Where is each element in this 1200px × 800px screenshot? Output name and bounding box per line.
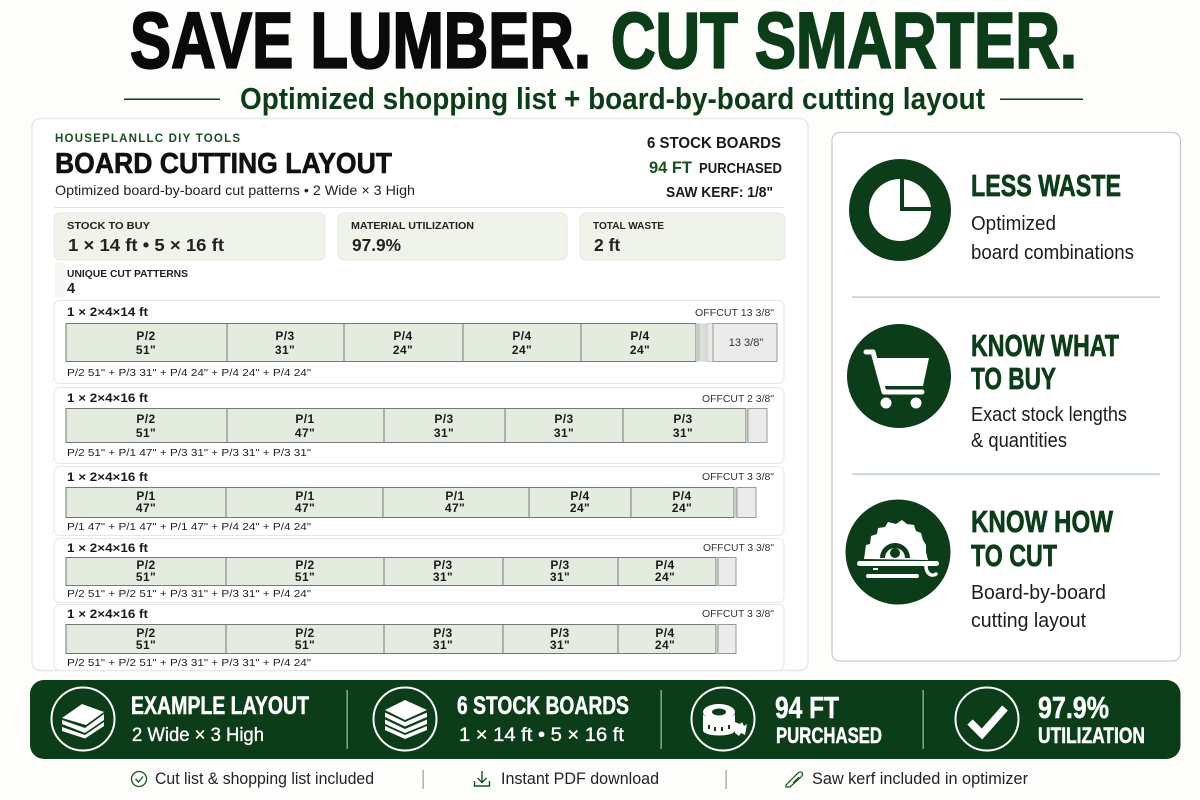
board row 3: 16 ft: 1 × 2×4×16 ft [67,472,148,484]
icon: tape measure [692,688,754,750]
benefit: less waste: LESS WASTE [971,168,1121,203]
stat: example layout [131,692,309,746]
board row 1: 14 ft: P/4 [393,329,413,343]
header summary: 6 STOCK BOARDS [647,135,781,152]
panel header [55,133,415,198]
stat: 6 stock boards: 6 STOCK BOARDS [457,692,629,720]
board row 5: 16 ft: 51" [295,638,315,652]
board row 4: 16 ft: P/2 [136,558,156,572]
benefit: know how to cut [971,504,1114,632]
board row 4: 16 ft: 1 × 2×4×16 ft [67,543,148,555]
benefit: less waste: board combinations [971,241,1134,264]
benefit: know how to cut: Board-by-board [971,581,1106,604]
board row 1: 14 ft: 13 3/8" [729,337,763,349]
header summary: 94 FT [649,159,692,177]
board row 1: 14 ft: P/4 [512,329,532,343]
stat: total waste: TOTAL WASTE [593,220,664,232]
benefit: less waste: Optimized [971,212,1056,235]
stat: material utilization: MATERIAL UTILIZATION [351,220,474,232]
board row 1: 14 ft: 31" [275,343,295,357]
benefit: less waste [971,168,1134,264]
stat: unique cut patterns: UNIQUE CUT PATTERNS [67,268,188,280]
board row 5: 16 ft: 51" [136,638,156,652]
board row 4: 16 ft: P/3 [550,558,570,572]
stat: 6 stock boards: 1 × 14 ft • 5 × 16 ft [459,725,625,746]
board row 1: 14 ft: OFFCUT 13 3/8" [695,307,774,319]
panel header: BOARD CUTTING LAYOUT [55,148,392,180]
footer note: cut list: Cut list & shopping list included [155,769,374,788]
board row 3: 16 ft: P/4 [570,489,590,503]
stat: material utilization [338,213,567,260]
board row 1: 14 ft: 51" [136,343,156,357]
icon: circular saw [846,500,950,604]
icon: board pile [374,688,436,750]
board row 3: 16 ft: P/1 [445,489,465,503]
board row 5: 16 ft: OFFCUT 3 3/8" [702,608,774,620]
board row 3: 16 ft: P/4 [672,489,692,503]
benefit: know what to buy: KNOW WHAT [971,328,1119,363]
stat: example layout: 2 Wide × 3 High [132,725,264,746]
header summary: PURCHASED [699,161,782,177]
board row 2: 16 ft: P/2 [136,412,156,426]
footer note: pdf download: Instant PDF download [501,769,659,788]
board row 1: 14 ft: P/4 [630,329,650,343]
stat: total waste [580,213,785,260]
stat: total waste: 2 ft [594,235,620,255]
panel: board cutting layout [32,118,808,670]
stat: 94 ft purchased [775,690,882,748]
board row 2: 16 ft: P/1 [295,412,315,426]
panel header: HOUSEPLANLLC DIY TOOLS [55,133,240,145]
panel header: Optimized board-by-board cut patterns • 2 Wide × 3 High [55,182,415,198]
board row 4: 16 ft: 24" [655,570,675,584]
board row 4: 16 ft: P/2 51" + P/2 51" + P/3 31" + P/3 31" + P/4 24" [67,588,311,600]
board row 5: 16 ft: 31" [433,638,453,652]
benefit: know what to buy [971,328,1127,452]
board row 3: 16 ft: 24" [672,501,692,515]
board row 1: 14 ft [54,300,784,384]
board row 4: 16 ft: 31" [433,570,453,584]
board row 1: 14 ft: 1 × 2×4×14 ft [67,307,148,319]
board row 2: 16 ft: P/3 [673,412,693,426]
benefit: know what to buy: TO BUY [971,361,1056,396]
subtitle with rules: Optimized shopping list + board-by-board cutting layout [240,81,985,116]
board row 5: 16 ft: P/3 [433,626,453,640]
board row 2: 16 ft: 1 × 2×4×16 ft [67,393,148,405]
benefit: know how to cut: cutting layout [971,609,1086,632]
stat: 94 ft purchased: PURCHASED [776,723,882,748]
title [130,0,1077,84]
board row 4: 16 ft: 31" [550,570,570,584]
stat: utilization [1038,690,1145,748]
board row 5: 16 ft: P/2 51" + P/2 51" + P/3 31" + P/3 31" + P/4 24" [67,657,311,669]
board row 1: 14 ft: 24" [512,343,532,357]
board row 2: 16 ft: 51" [136,426,156,440]
stat: utilization: 97.9% [1038,690,1109,725]
board row 2: 16 ft: 31" [554,426,574,440]
board row 1: 14 ft: 24" [630,343,650,357]
board row 4: 16 ft [54,538,784,602]
board row 2: 16 ft: P/2 51" + P/1 47" + P/3 31" + P/3 31" + P/3 31" [67,447,311,459]
board row 3: 16 ft: 47" [295,501,315,515]
board row 1: 14 ft: P/2 [136,329,156,343]
board row 3: 16 ft: P/1 [136,489,156,503]
icon: single board stack [52,688,114,750]
board row 2: 16 ft [54,388,784,464]
footer note: saw kerf: Saw kerf included in optimizer [812,769,1028,788]
board row 5: 16 ft: 31" [550,638,570,652]
board row 1: 14 ft: P/2 51" + P/3 31" + P/4 24" + P/4 24" + P/4 24" [67,367,311,379]
board row 2: 16 ft: 31" [673,426,693,440]
board row 5: 16 ft: P/2 [295,626,315,640]
stat: stock to buy [54,213,325,260]
board row 1: 14 ft: 24" [393,343,413,357]
board row 4: 16 ft: 51" [295,570,315,584]
board row 4: 16 ft: P/4 [655,558,675,572]
board row 2: 16 ft: OFFCUT 2 3/8" [702,393,774,405]
board row 5: 16 ft: P/2 [136,626,156,640]
board row 5: 16 ft: P/4 [655,626,675,640]
icon: shopping cart [847,324,951,428]
stat: 6 stock boards [457,692,629,746]
board row 1: 14 ft: P/3 [275,329,295,343]
benefit: know what to buy: Exact stock lengths [971,403,1127,426]
board row 5: 16 ft: P/3 [550,626,570,640]
header summary: SAW KERF: 1/8" [666,185,773,201]
board row 4: 16 ft: OFFCUT 3 3/8" [703,542,774,554]
panel: benefits [832,132,1180,661]
board row 3: 16 ft: 47" [445,501,465,515]
board row 4: 16 ft: 51" [136,570,156,584]
board row 2: 16 ft: P/3 [434,412,454,426]
board row 2: 16 ft: 47" [295,426,315,440]
board row 3: 16 ft [54,466,784,536]
header summary [647,135,782,201]
board row 3: 16 ft: P/1 47" + P/1 47" + P/1 47" + P/4 24" + P/4 24" [67,521,311,533]
board row 5: 16 ft: 24" [655,638,675,652]
stat: utilization: UTILIZATION [1038,723,1145,748]
benefit: know how to cut: KNOW HOW [971,504,1114,539]
board row 2: 16 ft: P/3 [554,412,574,426]
stat: unique cut patterns [54,262,188,297]
stat: 94 ft purchased: 94 FT [775,690,839,725]
benefit: know how to cut: TO CUT [971,538,1057,573]
icon: pie chart [849,159,951,261]
stat: unique cut patterns: 4 [67,281,75,297]
board row 4: 16 ft: P/2 [295,558,315,572]
board row 3: 16 ft: P/1 [295,489,315,503]
board row 3: 16 ft: OFFCUT 3 3/8" [702,471,774,483]
board row 4: 16 ft: P/3 [433,558,453,572]
board row 2: 16 ft: 31" [434,426,454,440]
board row 3: 16 ft: 24" [570,501,590,515]
summary bar [30,680,1180,759]
stat: example layout: EXAMPLE LAYOUT [131,692,309,720]
board row 3: 16 ft: 47" [136,501,156,515]
board row 5: 16 ft: 1 × 2×4×16 ft [67,609,148,621]
benefit: know what to buy: & quantities [971,429,1067,452]
stat: material utilization: 97.9% [352,235,401,255]
board row 5: 16 ft [54,604,784,670]
stat: stock to buy: STOCK TO BUY [67,220,150,232]
stat: stock to buy: 1 × 14 ft • 5 × 16 ft [68,235,224,255]
icon: check mark [956,688,1018,750]
